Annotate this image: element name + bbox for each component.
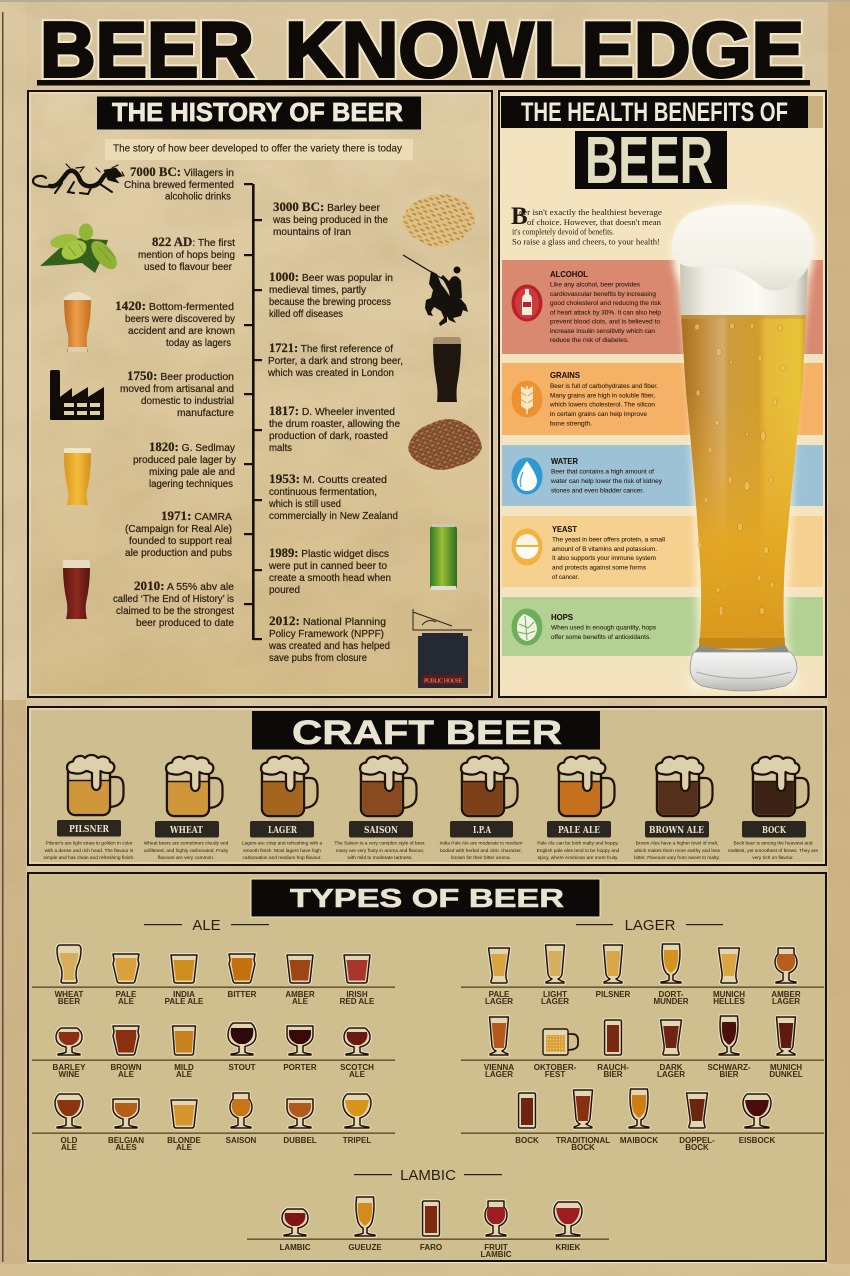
history text: right column: continuous fermentation, <box>269 487 377 498</box>
panel: craft beer <box>27 706 827 866</box>
kriek: KRIEK <box>556 1243 581 1252</box>
heading: beer: BEER <box>585 123 713 198</box>
intro text: it's completely devoid of benefits. <box>512 226 614 236</box>
beer style: pale ale: spicy, where American are more fruity. <box>538 855 618 861</box>
dubbel: DUBBEL <box>283 1136 317 1145</box>
droplets <box>694 323 786 616</box>
history text: left column: 7000 BC: Villagers in <box>130 165 234 179</box>
beer style: pilsner <box>44 755 134 861</box>
dark lager: LAGER <box>657 1070 685 1079</box>
rauchbier: RAUCH- <box>597 1063 629 1072</box>
barley wine: BARLEY <box>53 1063 86 1072</box>
heading: craft beer <box>252 711 600 752</box>
amber lager: LAGER <box>772 997 800 1006</box>
traditional bock: BOCK <box>571 1143 595 1152</box>
alcohol benefit: increase insulin sensitivity which can <box>550 328 655 335</box>
saison <box>226 1093 257 1145</box>
history text: right column: mountains of Iran <box>273 227 351 238</box>
icon: orange beer glass <box>64 292 91 352</box>
scotch ale: SCOTCH <box>340 1063 374 1072</box>
history text: right column: 1953: M. Coutts created <box>269 472 387 486</box>
intro text: So raise a glass and cheers, to your health! <box>512 236 660 246</box>
dubbel <box>283 1099 317 1145</box>
title: BEER <box>40 6 254 94</box>
history text: right column: save pubs from closure <box>269 653 367 664</box>
history text: left column: 1420: Bottom-fermented <box>115 299 234 313</box>
history text: right column: malts <box>269 443 292 454</box>
beer style: ipa: known for their bitter aroma. <box>451 855 511 861</box>
beer style: pale ale <box>537 756 620 861</box>
munich dunkel: MUNICH <box>770 1063 802 1072</box>
icon: green can <box>430 524 457 590</box>
timeline <box>244 183 262 640</box>
section heading: ale <box>144 917 269 934</box>
beer glass illustration <box>672 203 815 691</box>
pilsner <box>596 945 631 999</box>
icon: hop cone <box>512 608 542 646</box>
amber ale: AMBER <box>285 990 315 999</box>
history text: left column: 822 AD: The first <box>152 235 235 249</box>
history text: left column: moved from artisanal and <box>120 384 234 395</box>
icon: grain <box>512 380 542 418</box>
eisbock: EISBOCK <box>739 1136 775 1145</box>
alcohol benefit <box>550 270 662 344</box>
water benefit: WATER <box>551 457 578 466</box>
history text: left column: today as lagers <box>166 338 231 349</box>
pale ale: ALE <box>118 997 135 1006</box>
history text: right column: create a smooth head when <box>269 573 391 584</box>
colour bands <box>502 260 823 656</box>
icon: barley pile <box>402 194 475 247</box>
beer style: pilsner: Pilsner's are light straw to golden in color <box>45 840 133 846</box>
history text: right column: 1721: The first reference of <box>269 341 393 355</box>
amber lager <box>771 948 801 1006</box>
history text: left column: beer produced to date <box>136 618 234 629</box>
beer style: ipa <box>440 756 522 861</box>
beer style: saison: with mild to moderate tartness. <box>347 855 413 861</box>
history text: left column: claimed to be the strongest <box>116 606 234 617</box>
title <box>37 6 810 94</box>
lambic: LAMBIC <box>279 1243 311 1252</box>
title: BEER <box>40 6 254 94</box>
old ale: OLD <box>61 1136 78 1145</box>
section heading: lambic: LAMBIC <box>400 1167 456 1184</box>
beer style: brown ale: bitter. Flavours vary from sweet to malty. <box>634 855 720 861</box>
title: KNOWLEDGE <box>285 6 804 94</box>
history text: right column: which was created in London <box>267 368 394 379</box>
history text: right column: were put in canned beer to <box>268 561 387 572</box>
beer style: brown ale: BROWN ALE <box>649 826 704 836</box>
foam <box>672 205 813 291</box>
beer style: lager: LAGER <box>268 826 297 836</box>
old ale <box>55 1094 83 1152</box>
wheat beer: BEER <box>58 997 80 1006</box>
schwarzbier: BIER <box>719 1070 739 1079</box>
yeast benefit: amount of B vitamins and potassium. <box>552 546 657 553</box>
history text: left column: alcoholic drinks <box>165 192 231 202</box>
pale lager: LAGER <box>485 997 513 1006</box>
porter: PORTER <box>283 1063 317 1072</box>
brown ale <box>110 1026 142 1079</box>
beer style: pilsner: PILSNER <box>69 825 109 835</box>
barley wine: WINE <box>59 1070 80 1079</box>
belgian ales <box>108 1099 144 1152</box>
dark lager: DARK <box>659 1063 683 1072</box>
grains benefit: in certain grains can help improve <box>550 411 647 418</box>
oktoberfest stein: FEST <box>545 1070 565 1079</box>
beer style: lager <box>242 756 322 861</box>
maibock: MAIBOCK <box>620 1136 658 1145</box>
belgian ales: BELGIAN <box>108 1136 144 1145</box>
pale lager: PALE <box>489 990 510 999</box>
beer style: wheat: WHEAT <box>169 826 203 836</box>
doppelbock: DOPPEL- <box>679 1136 715 1145</box>
hops benefit: HOPS <box>551 613 573 622</box>
wheat beer <box>55 945 83 1006</box>
pale lager <box>485 948 513 1006</box>
beer style: lager: smooth finish. Most lagers have high <box>243 848 321 854</box>
dortmunder: DORT- <box>659 990 684 999</box>
scotch ale: ALE <box>349 1070 366 1079</box>
intro text <box>511 203 662 246</box>
tripel: TRIPEL <box>343 1136 371 1145</box>
intro text: B <box>511 203 528 230</box>
beer style: bock: very rich on flavour. <box>752 855 794 861</box>
icon: hops <box>40 224 121 273</box>
beer style: lager: Lagers are crisp and refreshing with a <box>242 840 322 846</box>
munich dunkel: DUNKEL <box>769 1070 803 1079</box>
pale ale: PALE <box>116 990 137 999</box>
history text: left column: mention of hops being <box>138 250 235 261</box>
history text: right column: killed off diseases <box>269 309 343 320</box>
old ale: ALE <box>61 1143 78 1152</box>
history text: left column: 1820: G. Sedlmay <box>149 440 235 454</box>
grains benefit: GRAINS <box>550 371 581 380</box>
wheat beer: WHEAT <box>55 990 83 999</box>
beer style: pale ale: PALE ALE <box>558 826 600 836</box>
section heading: lager: LAGER <box>625 917 676 934</box>
light lager <box>541 945 569 1006</box>
alcohol benefit: prevent blood clots, and is believed to <box>550 318 660 326</box>
history text: right column <box>267 200 403 664</box>
yeast benefit: YEAST <box>552 525 577 534</box>
beer style: ipa: I.P.A <box>473 826 492 836</box>
beer style: brown ale: which makes them more earthy and less <box>634 848 721 854</box>
bock: BOCK <box>515 1136 539 1145</box>
mild ale <box>172 1026 196 1079</box>
beer style: pilsner: with a dense and rich head. The flavour is <box>45 848 134 854</box>
bock <box>515 1093 539 1145</box>
icon: knight on horse <box>403 255 468 326</box>
history text: left column: used to flavour beer <box>144 262 233 273</box>
amber ale: ALE <box>292 997 309 1006</box>
fruit lambic: LAMBIC <box>480 1250 512 1259</box>
history text: right column: was created and has helped <box>268 641 390 652</box>
dortmunder <box>653 944 689 1006</box>
pilsner: PILSNER <box>596 990 631 999</box>
barley wine <box>53 1028 86 1079</box>
heading: the history of beer: THE HISTORY OF BEER <box>112 99 403 127</box>
gueuze: GUEUZE <box>348 1243 382 1252</box>
title: KNOWLEDGE <box>285 6 804 94</box>
light lager: LIGHT <box>543 990 567 999</box>
oktoberfest stein: OKTOBER- <box>534 1063 577 1072</box>
munich helles: HELLES <box>713 997 745 1006</box>
history text: right column: 1989: Plastic widget discs <box>269 546 389 560</box>
beer style: wheat: flavours are very common. <box>158 855 214 861</box>
history text: right column: medieval times, partly <box>269 285 366 296</box>
stout: STOUT <box>229 1063 256 1072</box>
munich helles <box>713 948 745 1006</box>
india pale ale: INDIA <box>173 990 195 999</box>
fruit lambic: FRUIT <box>484 1243 508 1252</box>
lambic <box>279 1209 311 1252</box>
beer style: saison: The Saison is a very complex style of beer, <box>334 840 426 846</box>
yeast benefit: and protects against some forms <box>552 564 647 572</box>
gueuze <box>348 1197 382 1252</box>
history text: left column: 1971: CAMRA <box>161 509 232 523</box>
icon: malt pile <box>408 419 482 470</box>
brown ale: BROWN <box>110 1063 142 1072</box>
history text: left column: accident and are known <box>128 326 235 337</box>
history text: left column: China brewed fermented <box>124 180 234 191</box>
heading: craft beer: CRAFT BEER <box>292 714 562 752</box>
beer style: lager: carbonation and medium hop flavour. <box>243 855 321 861</box>
beer style: ipa: India Pale Ale are moderate to medium <box>440 840 522 846</box>
shelf lines <box>32 986 824 1240</box>
intro text: eer isn't exactly the healthiest beverage <box>519 207 662 217</box>
icon: water drop <box>512 458 542 494</box>
belgian ales: ALES <box>115 1143 137 1152</box>
alcohol benefit: cardiovascular benefits by increasing <box>550 291 656 298</box>
section heading: ale: ALE <box>192 917 221 934</box>
amber lager: AMBER <box>771 990 801 999</box>
history text: left column: manufacture <box>177 408 234 419</box>
beer style: wheat: unfiltered, and highly carbonated. Fruity <box>144 848 229 854</box>
history text: left column <box>113 165 236 629</box>
history text: right column: was being produced in the <box>272 215 388 226</box>
irish red ale: IRISH <box>346 990 368 999</box>
history text: left column: founded to support real <box>129 536 232 547</box>
hops benefit <box>551 613 657 641</box>
grains benefit <box>549 371 658 428</box>
rauchbier <box>597 1020 629 1079</box>
beer style: bock <box>728 756 818 861</box>
icon: pub sign: PUBLIC HOUSE <box>424 678 462 684</box>
beer style: pilsner: simple and has clean and refreshing finish. <box>44 855 134 861</box>
history text: right column: Policy Framework (NPPF) <box>269 629 384 640</box>
grains benefit: which lowers cholesterol. The silicon <box>549 402 655 408</box>
hops benefit: When used in enough quantity, hops <box>551 624 657 632</box>
bitter: BITTER <box>228 990 257 999</box>
icon: stout glass <box>433 337 461 402</box>
beer style: saison: SAISON <box>364 826 398 836</box>
blonde ale: BLONDE <box>167 1136 202 1145</box>
heading: types of beer: TYPES OF BEER <box>290 885 564 913</box>
beer style: ipa: bodied with herbal and citric character, <box>440 848 522 854</box>
stout <box>228 1023 256 1072</box>
alcohol benefit: reduce the risk of diabetes. <box>550 337 629 344</box>
grains benefit: Beer is full of carbohydrates and fiber. <box>550 383 658 390</box>
bitter <box>228 954 257 999</box>
history text: left column: 1750: Beer production <box>127 369 234 383</box>
munich helles: MUNICH <box>713 990 745 999</box>
blonde ale: ALE <box>176 1143 193 1152</box>
schwarzbier <box>707 1016 751 1079</box>
faro <box>420 1201 442 1252</box>
yeast benefit: The yeast in beer offers protein, a small <box>552 536 666 544</box>
vienna lager: VIENNA <box>484 1063 514 1072</box>
irish red ale: RED ALE <box>340 997 375 1006</box>
beer style: saison: many are very fruity in aroma and flavour, <box>336 848 424 854</box>
alcohol benefit: good cholesterol and reducing the risk <box>550 300 662 307</box>
history text: left column: beers were discovered by <box>125 314 235 325</box>
icon: yeast <box>512 528 542 566</box>
beer style: bock: BOCK <box>762 826 787 836</box>
water benefit <box>550 457 663 494</box>
beer style: bock: maltiest, yet smoothest of brews. They are <box>728 848 818 854</box>
lager glasses <box>484 944 803 1152</box>
grains benefit: Many grains are high in soluble fiber, <box>550 392 655 400</box>
kriek <box>554 1202 582 1252</box>
oktoberfest stein <box>534 1029 578 1079</box>
tripel <box>343 1094 371 1145</box>
history text: right column: 3000 BC: Barley beer <box>273 200 381 214</box>
alcohol benefit: Like any alcohol, beer provides <box>550 282 641 288</box>
lambic glasses <box>279 1197 582 1259</box>
india pale ale: PALE ALE <box>165 997 204 1006</box>
munich dunkel <box>769 1017 803 1079</box>
history text: left column: domestic to industrial <box>141 396 234 407</box>
panel: types of beer <box>27 872 827 1263</box>
porter <box>283 1026 317 1072</box>
light lager: LAGER <box>541 997 569 1006</box>
blonde ale <box>167 1100 202 1152</box>
history text: right column: 1817: D. Wheeler invented <box>269 404 395 418</box>
yeast benefit <box>552 525 666 581</box>
yeast benefit: of cancer. <box>552 574 579 581</box>
history text: left column: 2010: A 55% abv ale <box>134 579 234 593</box>
doppelbock <box>679 1093 715 1152</box>
brown ale: ALE <box>118 1070 135 1079</box>
history text: left column: mixing pale ale and <box>149 467 235 478</box>
vienna lager: LAGER <box>485 1070 513 1079</box>
hops benefit: offer some benefits of antioxidants. <box>551 634 651 641</box>
icon: dragon <box>33 164 124 194</box>
eisbock <box>739 1094 775 1145</box>
faro: FARO <box>420 1243 442 1252</box>
history text: right column: because the brewing process <box>269 297 391 308</box>
history text: left column: (Campaign for Real Ale) <box>125 524 232 535</box>
ale glasses <box>53 945 375 1152</box>
pale ale <box>113 954 139 1006</box>
history text: left column: lagering techniques <box>149 479 233 490</box>
icon: alcohol bottle <box>512 284 542 322</box>
beer style: wheat: Wheat beers are sometimes cloudy and <box>144 840 229 846</box>
history text: right column: the drum roaster, allowing the <box>269 419 400 430</box>
beer style: brown ale: Brown Ales have a higher level of malt, <box>636 840 718 846</box>
icon: pale beer glass <box>64 448 91 505</box>
rauchbier: BIER <box>603 1070 623 1079</box>
beer style: wheat <box>144 756 229 861</box>
mild ale: ALE <box>176 1070 193 1079</box>
panel: health benefits of beer <box>498 90 828 698</box>
mild ale: MILD <box>174 1063 194 1072</box>
scotch ale <box>340 1028 374 1079</box>
grains benefit: bone strength. <box>550 420 592 428</box>
india pale ale <box>165 955 204 1006</box>
icon: factory <box>50 370 104 420</box>
history text: left column: ale production and pubs <box>125 548 232 559</box>
history text: left column: produced pale lager by <box>133 455 236 466</box>
alcohol benefit: of heart attack by 30%. It can also help <box>550 310 661 316</box>
beer style: pale ale: Pale Ale can be both malty and hoppy. <box>537 840 619 846</box>
alcohol benefit: ALCOHOL <box>550 270 588 279</box>
heading: types of beer <box>251 879 600 917</box>
traditional bock <box>556 1090 610 1152</box>
beer style: saison <box>334 756 426 861</box>
amber ale <box>285 955 315 1006</box>
yeast benefit: It also supports your immune system <box>552 555 656 562</box>
traditional bock: TRADITIONAL <box>556 1136 610 1145</box>
water benefit: water can help lower the risk of kidney <box>550 478 663 485</box>
water benefit: Beer that contains a high amount of <box>551 468 654 476</box>
fruit lambic <box>480 1201 512 1259</box>
history text: right column: which is still used <box>268 499 341 510</box>
intro text: of choice. However, that doesn't mean <box>527 217 662 227</box>
history text: right column: poured <box>269 585 300 596</box>
beer style: brown ale <box>634 756 721 861</box>
irish red ale <box>340 955 375 1006</box>
history text: left column: called ‘The End of History’ is <box>113 594 234 605</box>
schwarzbier: SCHWARZ- <box>707 1063 751 1072</box>
beer style: pale ale: English pale ales tend to be hoppy and <box>537 848 620 854</box>
dortmunder: MUNDER <box>653 997 689 1006</box>
maibock <box>620 1089 658 1145</box>
history text: right column: production of dark, roasted <box>269 431 388 442</box>
vienna lager <box>484 1017 514 1079</box>
doppelbock: BOCK <box>685 1143 709 1152</box>
beer style: bock: Bock beer is among the heaviest and <box>734 840 813 846</box>
history text: right column: 2012: National Planning <box>269 614 386 628</box>
history text: right column: commercially in New Zealand <box>269 511 398 522</box>
history text: right column: 1000: Beer was popular in <box>269 270 393 284</box>
saison: SAISON <box>226 1136 257 1145</box>
icon: pub sign <box>413 609 472 688</box>
subtitle: The story of how beer developed to offer the variety there is today <box>113 142 403 154</box>
history text: right column: Porter, a dark and strong beer, <box>268 356 403 367</box>
panel: history of beer <box>27 90 493 698</box>
subtitle <box>105 139 413 160</box>
water benefit: stones and even bladder cancer. <box>551 488 644 494</box>
dark lager <box>657 1020 685 1079</box>
icon: red beer glass <box>63 560 90 619</box>
